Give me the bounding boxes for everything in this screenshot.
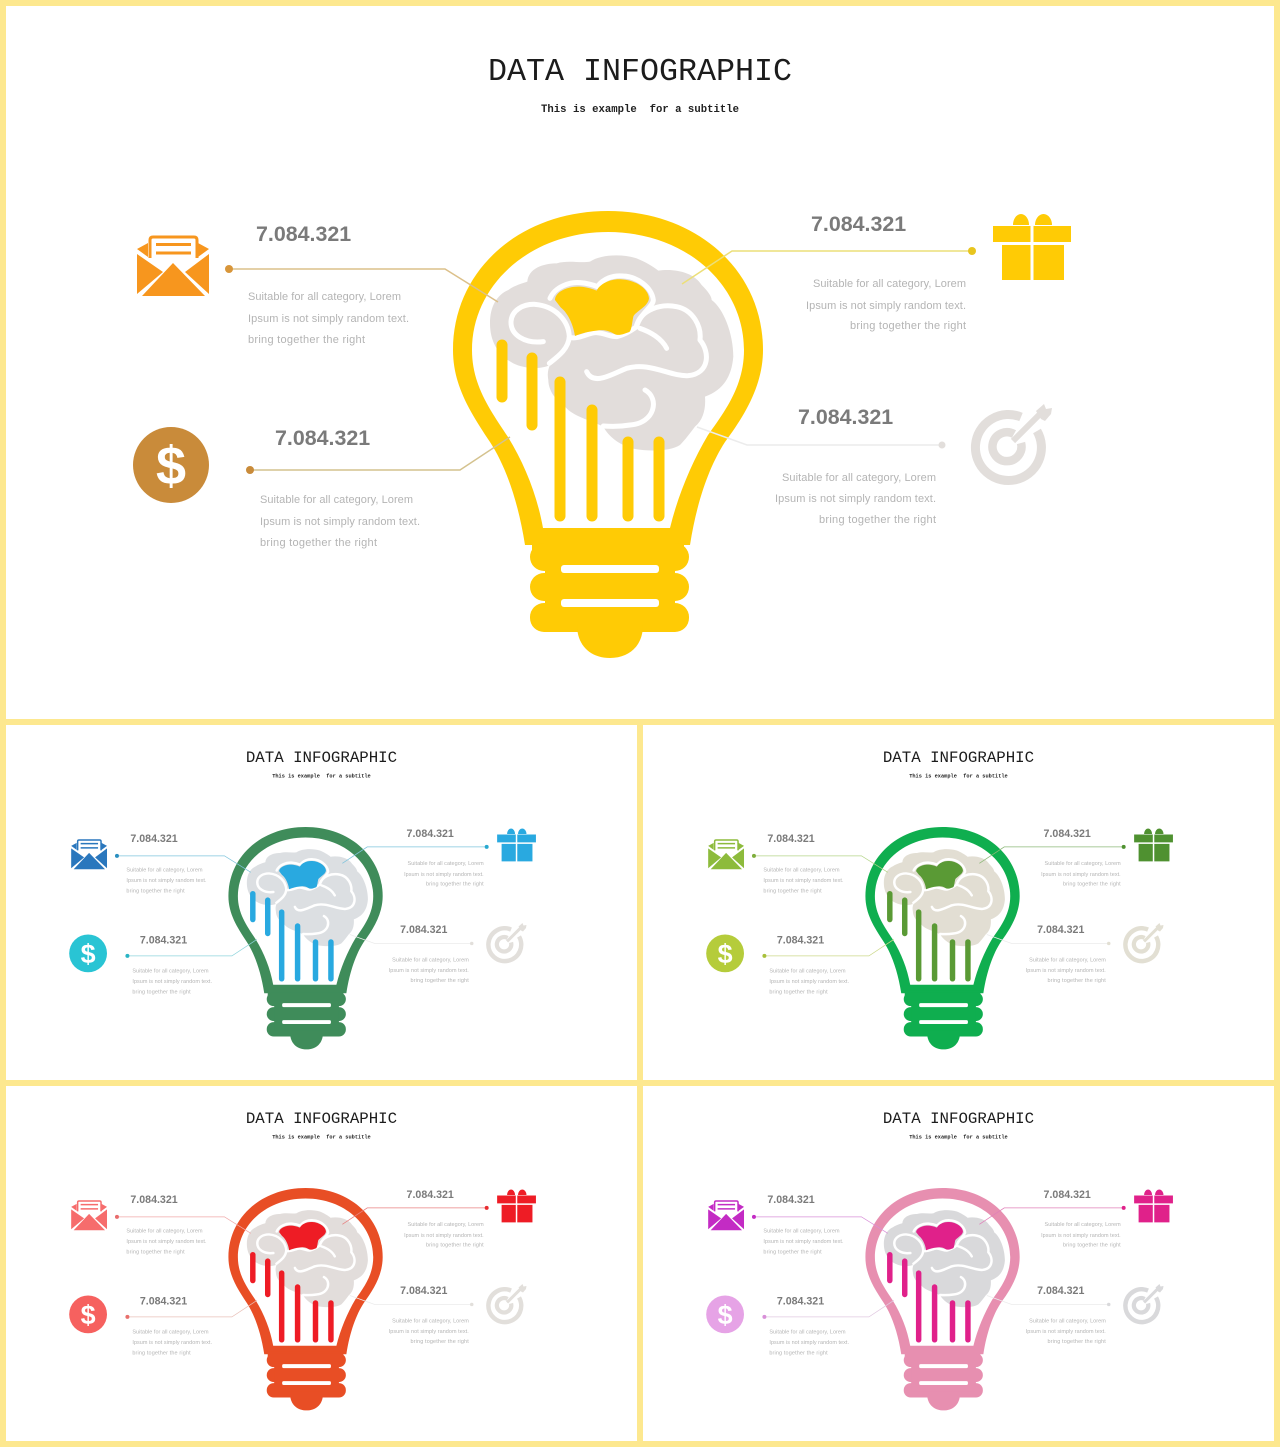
icon: envelope (71, 1201, 107, 1230)
values and text blocks: 7.084.321 (407, 1189, 454, 1201)
values and text blocks: Suitable for all category, Lorem (763, 1228, 840, 1234)
panel: green and blue slide (6, 725, 637, 1080)
values and text blocks: Ipsum is not simply random text. (1026, 1329, 1106, 1335)
icon: gift (1134, 828, 1173, 861)
values and text blocks: Ipsum is not simply random text. (769, 979, 849, 985)
icon: envelope (137, 237, 209, 296)
icon: envelope (708, 840, 744, 869)
text block top right (806, 278, 966, 332)
values and text blocks (126, 828, 484, 996)
values and text blocks: Suitable for all category, Lorem (1029, 957, 1106, 963)
values and text blocks: Suitable for all category, Lorem (392, 1318, 469, 1324)
values and text blocks: Suitable for all category, Lorem (392, 957, 469, 963)
values and text blocks: Ipsum is not simply random text. (763, 878, 844, 884)
values and text blocks: Ipsum is not simply random text. (126, 1239, 207, 1245)
values and text blocks: bring together the right (132, 990, 191, 996)
values and text blocks: bring together the right (769, 1351, 828, 1357)
values and text blocks: 7.084.321 (767, 833, 815, 845)
values and text blocks: bring together the right (1063, 882, 1121, 888)
values and text blocks: Ipsum is not simply random text. (1041, 872, 1121, 878)
values and text blocks (763, 1189, 1121, 1357)
icon: gift (497, 1189, 536, 1222)
values and text blocks: bring together the right (763, 1250, 822, 1256)
values and text blocks: 7.084.321 (400, 924, 447, 936)
values and text blocks: bring together the right (126, 889, 185, 895)
icon: dollar coin (133, 427, 209, 503)
values and text blocks: Ipsum is not simply random text. (763, 1239, 844, 1245)
light bulb with brain (228, 1188, 383, 1410)
leader lines (115, 1206, 489, 1319)
values and text blocks: Ipsum is not simply random text. (389, 968, 469, 974)
icon: dollar coin: $ (81, 1300, 96, 1330)
values and text blocks: Suitable for all category, Lorem (132, 1329, 209, 1335)
light bulb with brain (453, 211, 763, 658)
values and text blocks: 7.084.321 (1037, 1285, 1084, 1297)
values and text blocks: bring together the right (126, 1250, 185, 1256)
values and text blocks (126, 1189, 484, 1357)
values and text blocks: 7.084.321 (130, 833, 178, 845)
icon: gift (993, 214, 1071, 280)
leader lines (115, 845, 489, 958)
text block bottom left: Ipsum is not simply random text. (260, 516, 420, 528)
light bulb with brain (228, 827, 383, 1049)
values and text blocks: bring together the right (426, 882, 484, 888)
text block bottom left (260, 494, 420, 549)
text block top left: bring together the right (248, 334, 365, 346)
values and text blocks: Suitable for all category, Lorem (769, 968, 846, 974)
values and text blocks: bring together the right (411, 1339, 469, 1345)
value top left: 7.084.321 (256, 222, 351, 246)
values and text blocks: 7.084.321 (140, 1295, 187, 1307)
title: DATA INFOGRAPHIC (488, 54, 792, 90)
text block top right: bring together the right (850, 320, 966, 332)
values and text blocks: Suitable for all category, Lorem (408, 861, 484, 867)
icon: envelope (71, 840, 107, 869)
values and text blocks: Suitable for all category, Lorem (126, 1228, 203, 1234)
leader lines (752, 845, 1126, 958)
panel: green slide (643, 725, 1274, 1080)
icon: dollar coin: $ (81, 939, 96, 969)
subtitle: This is example for a subtitle (909, 1135, 1008, 1141)
subtitle: This is example for a subtitle (272, 774, 371, 780)
icon: dollar coin (69, 1295, 107, 1333)
subtitle: This is example for a subtitle (272, 1135, 371, 1141)
value top right: 7.084.321 (811, 212, 906, 236)
panel: large yellow slide (6, 6, 1274, 719)
values and text blocks: bring together the right (1063, 1243, 1121, 1249)
leader line: gift (682, 247, 976, 284)
values and text blocks: Ipsum is not simply random text. (1026, 968, 1106, 974)
values and text blocks: 7.084.321 (400, 1285, 447, 1297)
values and text blocks: Suitable for all category, Lorem (769, 1329, 846, 1335)
light bulb with brain (865, 1188, 1020, 1410)
values and text blocks: Ipsum is not simply random text. (132, 1340, 212, 1346)
subtitle: This is example for a subtitle (909, 774, 1008, 780)
icon: dollar coin (706, 1295, 744, 1333)
values and text blocks: Ipsum is not simply random text. (769, 1340, 849, 1346)
values and text blocks: 7.084.321 (1044, 828, 1091, 840)
text block bottom left: bring together the right (260, 537, 377, 549)
icon: dollar coin: $ (718, 939, 733, 969)
values and text blocks: Suitable for all category, Lorem (1045, 861, 1121, 867)
leader lines (752, 1206, 1126, 1319)
values and text blocks: 7.084.321 (777, 934, 824, 946)
icon: target (1125, 923, 1163, 961)
values and text blocks: Ipsum is not simply random text. (132, 979, 212, 985)
panel: red slide (6, 1086, 637, 1441)
icon: target (488, 1284, 526, 1322)
title: DATA INFOGRAPHIC (246, 1110, 397, 1128)
values and text blocks (763, 828, 1121, 996)
icon: target (1125, 1284, 1163, 1322)
values and text blocks: Ipsum is not simply random text. (404, 1233, 484, 1239)
values and text blocks: bring together the right (426, 1243, 484, 1249)
values and text blocks: 7.084.321 (140, 934, 187, 946)
text block top left: Suitable for all category, Lorem (248, 291, 401, 303)
title: DATA INFOGRAPHIC (883, 749, 1034, 767)
icon: gift (1134, 1189, 1173, 1222)
values and text blocks: bring together the right (763, 889, 822, 895)
icon: envelope (708, 1201, 744, 1230)
title: DATA INFOGRAPHIC (883, 1110, 1034, 1128)
values and text blocks: Suitable for all category, Lorem (1045, 1222, 1121, 1228)
value bottom right: 7.084.321 (798, 405, 893, 429)
icon: dollar coin (706, 934, 744, 972)
panel: pink slide (643, 1086, 1274, 1441)
text block top left (248, 291, 409, 346)
values and text blocks: Ipsum is not simply random text. (404, 872, 484, 878)
light bulb with brain (865, 827, 1020, 1049)
values and text blocks: 7.084.321 (1044, 1189, 1091, 1201)
values and text blocks: bring together the right (1048, 1339, 1106, 1345)
values and text blocks: bring together the right (1048, 978, 1106, 984)
icon: target (488, 923, 526, 961)
subtitle: This is example for a subtitle (541, 104, 739, 116)
text block bottom right: Ipsum is not simply random text. (775, 493, 936, 505)
values and text blocks: Suitable for all category, Lorem (126, 867, 203, 873)
values and text blocks: 7.084.321 (407, 828, 454, 840)
value bottom left: 7.084.321 (275, 426, 370, 450)
values and text blocks: Ipsum is not simply random text. (126, 878, 207, 884)
icon: target (975, 404, 1052, 481)
text block bottom right: bring together the right (819, 514, 936, 526)
values and text blocks: Suitable for all category, Lorem (132, 968, 209, 974)
values and text blocks: Ipsum is not simply random text. (389, 1329, 469, 1335)
text block top right: Suitable for all category, Lorem (813, 278, 966, 290)
text block bottom left: Suitable for all category, Lorem (260, 494, 413, 506)
values and text blocks: Suitable for all category, Lorem (1029, 1318, 1106, 1324)
leader line: dollar (246, 437, 510, 474)
values and text blocks: Ipsum is not simply random text. (1041, 1233, 1121, 1239)
title: DATA INFOGRAPHIC (246, 749, 397, 767)
values and text blocks: bring together the right (132, 1351, 191, 1357)
icon: dollar coin: $ (718, 1300, 733, 1330)
values and text blocks: 7.084.321 (767, 1194, 815, 1206)
text block top left: Ipsum is not simply random text. (248, 313, 409, 325)
icon: dollar coin (69, 934, 107, 972)
values and text blocks: Suitable for all category, Lorem (763, 867, 840, 873)
text block bottom right: Suitable for all category, Lorem (782, 472, 936, 484)
values and text blocks: 7.084.321 (130, 1194, 178, 1206)
values and text blocks: bring together the right (411, 978, 469, 984)
values and text blocks: 7.084.321 (1037, 924, 1084, 936)
values and text blocks: bring together the right (769, 990, 828, 996)
icon: dollar coin: $ (156, 436, 186, 496)
values and text blocks: Suitable for all category, Lorem (408, 1222, 484, 1228)
values and text blocks: 7.084.321 (777, 1295, 824, 1307)
leader line: envelope (225, 265, 498, 302)
text block top right: Ipsum is not simply random text. (806, 300, 966, 312)
icon: gift (497, 828, 536, 861)
leader line: target (697, 427, 946, 448)
text block bottom right (775, 472, 936, 526)
